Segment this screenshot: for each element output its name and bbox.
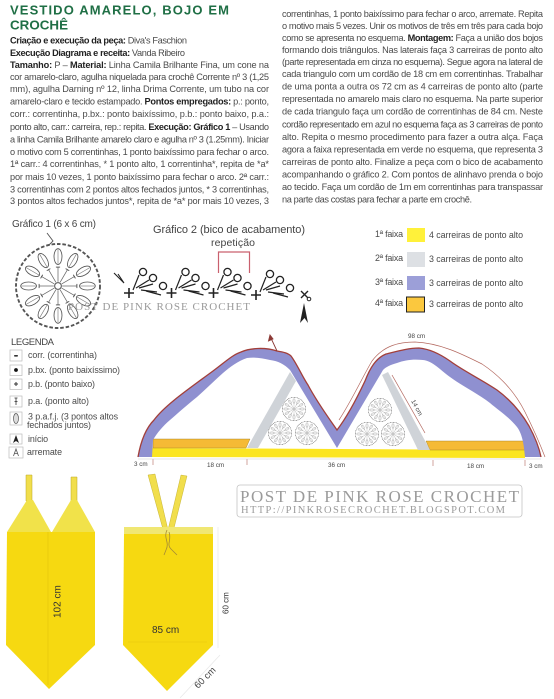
garment: front view: 102 cm bbox=[52, 585, 64, 618]
diagram: assembled top schematic: 3 cm bbox=[134, 461, 148, 468]
text block: right column instructions: correntinhas, 1 ponto baixíssimo para fechar o arco, arremate. Repita bbox=[282, 9, 544, 19]
watermark: diagram: POST DE PINK ROSE CROCHET bbox=[68, 301, 250, 313]
legend: stitches: p.bx. (ponto baixíssimo) bbox=[28, 365, 120, 375]
text block: right column instructions: alto. Repita o mesmo procedimento para fazer a outra alça. Faça bbox=[282, 132, 544, 142]
chart: gráfico 1 crochet motif: Gráfico 1 (6 x 6 cm) bbox=[12, 219, 96, 230]
text block: right column instructions: cordão representado em azul no esquema faça as 3 carreiras de ponto bbox=[282, 120, 543, 130]
body bbox=[6, 532, 95, 689]
text block: left column instructions: a linha Camila Brilhante amarelo claro e agulha nº 3 (1.25mm). Iniciar bbox=[10, 134, 269, 144]
garment: back view: 85 cm bbox=[152, 625, 179, 636]
legend: color bands: 3 carreiras de ponto alto bbox=[429, 299, 523, 309]
yellow band bbox=[152, 448, 525, 458]
chart: gráfico 2 edging: repetição bbox=[211, 237, 255, 249]
legend: color bands: 4 carreiras de ponto alto bbox=[429, 230, 523, 240]
legend: stitches: fechados juntos) bbox=[27, 420, 91, 430]
watermark: blog box: HTTP://PINKROSECROCHET.BLOGSPOT.COM bbox=[241, 505, 506, 516]
legend: color bands: 4ª faixa bbox=[375, 298, 403, 308]
text block: left column instructions: cor amarelo-claro, agulha niquelada para crochê Corrente nº 3 (1,25 bbox=[10, 72, 269, 82]
text block: left column instructions: por mais 10 vezes, 1 ponto baixíssimo para fechar o arco. 2ª carr.: bbox=[10, 172, 269, 182]
watermark: blog box bbox=[237, 485, 522, 517]
repeat bracket bbox=[218, 252, 250, 273]
legend: color bands: 3 carreiras de ponto alto bbox=[429, 278, 523, 288]
legend: stitches: arremate bbox=[27, 447, 62, 457]
straps bbox=[148, 474, 187, 533]
legend: stitches: p.a. (ponto alto) bbox=[28, 396, 89, 406]
text block: right column instructions: de cada triangulo faça um cordão de correntinhas de 84 cm. Neste bbox=[282, 106, 543, 116]
grey strips bbox=[247, 372, 296, 448]
diagram: assembled top schematic: 18 cm bbox=[467, 463, 484, 470]
blue strap bbox=[138, 348, 541, 457]
text block: left column instructions: Criação e execução da peça: Diva's Faschion bbox=[10, 36, 187, 46]
straps bbox=[26, 475, 77, 501]
text block: right column instructions: o motivo mais 5 vezes. Unir os motivos de três em três para cada bojo bbox=[282, 21, 543, 31]
text block: right column instructions: como se apresenta no esquema. Montagem: Faça a união dos bojos bbox=[282, 33, 543, 43]
chart: gráfico 2 edging: Gráfico 2 (bico de acabamento) bbox=[153, 224, 305, 236]
legend: color bands bbox=[375, 228, 523, 312]
text block: right column instructions: cada triangulo com um cordão de 18 cm em correntinhas. Trabalhar bbox=[282, 69, 543, 79]
legend: stitches: LEGENDA bbox=[11, 337, 55, 348]
diagram: assembled top schematic bbox=[134, 333, 545, 470]
chart: gráfico 2 edging bbox=[114, 224, 311, 323]
text block: right column instructions: formando dois triângulos. Nas laterais faça 3 carreiras de ponto alto bbox=[282, 45, 543, 55]
legend: stitches: corr. (correntinha) bbox=[28, 350, 97, 360]
orange band left bbox=[153, 439, 250, 448]
arrow bbox=[268, 335, 277, 351]
text block: right column instructions bbox=[282, 9, 544, 204]
measure arc 98 cm bbox=[339, 342, 545, 457]
cups bbox=[7, 500, 95, 532]
text block: left column instructions: 3 correntinhas com 2 pontos altos fechados juntos, * 3 correntinhas, bbox=[10, 184, 269, 194]
body bbox=[123, 534, 213, 691]
measure ticks and labels bbox=[153, 459, 525, 466]
diagram: assembled top schematic: 14 cm bbox=[409, 399, 423, 417]
red outer edge bbox=[138, 348, 541, 457]
diagram: assembled top schematic: 98 cm bbox=[408, 333, 425, 340]
text block: right column instructions: carreiras de ponto alto. Finalize a peça com o bico de acabamento bbox=[282, 157, 543, 167]
garment: back view: 60 cm bbox=[222, 592, 230, 614]
text block: left column instructions: amarelo-claro e tecido estampado. Pontos empregados: p.: ponto, bbox=[10, 96, 269, 106]
crochet motifs in triangles bbox=[268, 397, 405, 446]
text block: right column instructions: representada no amarelo mais claro no esquema. Na parte superior bbox=[282, 94, 543, 104]
legend: color bands: 2ª faixa bbox=[375, 253, 403, 263]
swatch: 1st band bbox=[407, 228, 425, 242]
title bbox=[10, 2, 229, 32]
text block: right column instructions: acompanhando o gráfico 2. Com pontos de alinhavo prenda o bojo bbox=[282, 170, 543, 180]
text block: left column instructions: Execução Diagrama e receita: Vanda Ribeiro bbox=[10, 48, 185, 58]
text block: left column instructions bbox=[10, 36, 270, 206]
text block: left column instructions: 1ª carr.: 4 correntinhas, * 1 ponto alto, 1 correntinha*, repita de *a* bbox=[10, 159, 269, 169]
watermark: blog box: POST DE PINK ROSE CROCHET bbox=[240, 487, 520, 506]
text block: left column instructions: mm), agulha Darning nº 12, linha Drima Corrente, um tubo na cor bbox=[10, 84, 269, 94]
measure line 14 cm bbox=[392, 375, 425, 433]
swatch: 2nd band bbox=[407, 252, 425, 267]
legend: color bands: 3 carreiras de ponto alto bbox=[429, 254, 523, 264]
diagram: assembled top schematic: 3 cm bbox=[529, 463, 543, 470]
swatch: 4th band bbox=[406, 297, 424, 312]
legend: stitches bbox=[9, 337, 120, 458]
diagram: assembled top schematic: 18 cm bbox=[207, 462, 224, 469]
legend: stitches: 3 p.a.f.j. (3 pontos altos bbox=[28, 412, 119, 422]
text block: right column instructions: de uma ponta a outra os 72 cm as 4 carreiras de ponto alto (parte bbox=[282, 82, 543, 92]
text block: right column instructions: (parte representada em cinza no esquema). Segue agora na lateral de bbox=[282, 57, 543, 67]
text block: left column instructions: 3 pontos altos fechados juntos*, repita de *a* por mais 10 vezes, 3 bbox=[10, 196, 269, 206]
title: CROCHÊ bbox=[10, 18, 68, 32]
swatch: 3rd band bbox=[407, 276, 425, 290]
garment: back view bbox=[123, 474, 230, 698]
orange band right bbox=[426, 441, 525, 450]
garment: front view bbox=[6, 475, 95, 689]
text block: left column instructions: o motivo com 5 correntinhas, 1 ponto baixíssimo para fechar o arco. bbox=[10, 147, 269, 157]
legend: color bands: 3ª faixa bbox=[375, 277, 403, 287]
text block: left column instructions: Tamanho: P – Material: Linha Camila Brilhante Fina, um cone na bbox=[10, 60, 270, 70]
text block: right column instructions: ao tecido. Faça um cordão de 1m em correntinhas para transpassar bbox=[282, 182, 543, 192]
cord bbox=[164, 530, 177, 555]
chart: gráfico 1 crochet motif bbox=[12, 219, 100, 328]
text block: right column instructions: na parte das costas para fechar a parte em crochê. bbox=[282, 194, 472, 204]
legend: color bands: 1ª faixa bbox=[375, 229, 403, 239]
title: VESTIDO AMARELO, BOJO EM bbox=[10, 2, 229, 18]
diagram: assembled top schematic: 36 cm bbox=[328, 462, 345, 469]
text block: left column instructions: ponto alto, carr.: carreira, rep.: repita. Execução: Gráfico 1 – Usando bbox=[10, 122, 269, 132]
text block: left column instructions: corr.: correntinha, p.bx.: ponto baixíssimo, p.b.: ponto baixo, p.a.: bbox=[10, 109, 269, 119]
text block: right column instructions: agora a faixa representada em verde no esquema, que representa 3 bbox=[282, 144, 543, 154]
legend: stitches: início bbox=[28, 434, 48, 444]
stitch repeats bbox=[114, 268, 311, 323]
waist band bbox=[124, 527, 213, 534]
legend: stitches: p.b. (ponto baixo) bbox=[28, 379, 95, 389]
garment: back view: 60 cm bbox=[192, 665, 218, 691]
